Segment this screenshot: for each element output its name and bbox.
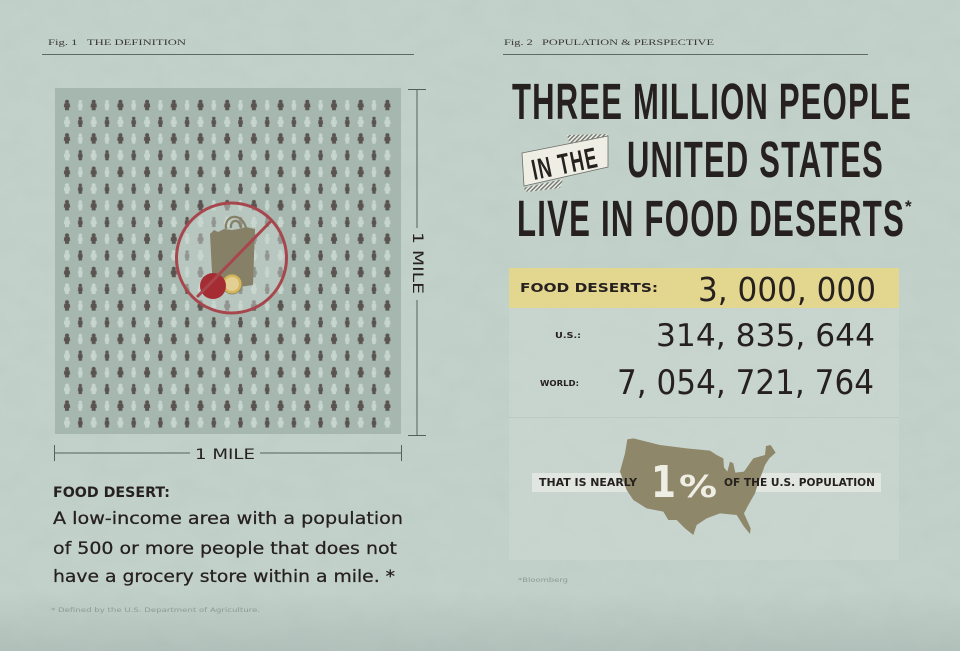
dimension: horizontal 1 mile <box>54 445 402 463</box>
map of the United States <box>620 438 776 535</box>
stat: U.S. <box>555 318 875 354</box>
dimension: vertical 1 mile: 1 MILE <box>409 232 425 294</box>
food desert definition: of 500 or more people that does not <box>53 539 398 558</box>
stat: world: 7, 054, 721, 764 <box>617 363 874 403</box>
figure 2 heading: Fig. 2 POPULATION & PERSPECTIVE <box>504 37 714 47</box>
stat: U.S.: 314, 835, 644 <box>656 318 875 354</box>
comparison panel background <box>509 308 899 560</box>
food desert definition: A low-income area with a population <box>53 509 403 528</box>
stat: world <box>509 363 899 418</box>
ribbon: in the <box>522 134 608 192</box>
label: of the U.S. population: OF THE U.S. POPULATION <box>724 477 875 489</box>
label: 1 percent <box>651 457 717 508</box>
stat: food deserts: 3, 000, 000 <box>698 270 876 309</box>
stat: food deserts <box>509 268 899 309</box>
title: * <box>905 197 912 216</box>
footnote: Bloomberg: *Bloomberg <box>518 576 568 584</box>
dimension: horizontal 1 mile: 1 MILE <box>195 447 255 463</box>
icon: no grocery bag <box>176 203 286 313</box>
ribbon: in the: IN THE <box>529 142 601 187</box>
US map with one percent callout <box>532 438 881 535</box>
food desert definition: have a grocery store within a mile. * <box>53 567 395 586</box>
stat: food deserts: FOOD DESERTS: <box>520 281 658 295</box>
panel: figure 1 the definition <box>42 37 426 614</box>
food desert definition <box>53 485 403 586</box>
dimension: vertical 1 mile <box>408 90 426 436</box>
panel: figure 2 population and perspective <box>503 37 912 584</box>
food desert definition: FOOD DESERT: <box>53 485 170 501</box>
label: 1 percent: % <box>679 470 717 505</box>
one square mile population grid <box>55 88 401 434</box>
label: that is nearly: THAT IS NEARLY <box>539 477 637 489</box>
stat: U.S.: U.S.: <box>555 331 581 340</box>
label: 1 percent: 1 <box>651 457 676 508</box>
label band <box>532 473 881 492</box>
title <box>512 73 912 247</box>
footnote: USDA: * Defined by the U.S. Department of Agriculture. <box>51 606 260 614</box>
figure 1 heading: Fig. 1 THE DEFINITION <box>48 37 186 47</box>
stat: world: WORLD: <box>540 379 579 388</box>
